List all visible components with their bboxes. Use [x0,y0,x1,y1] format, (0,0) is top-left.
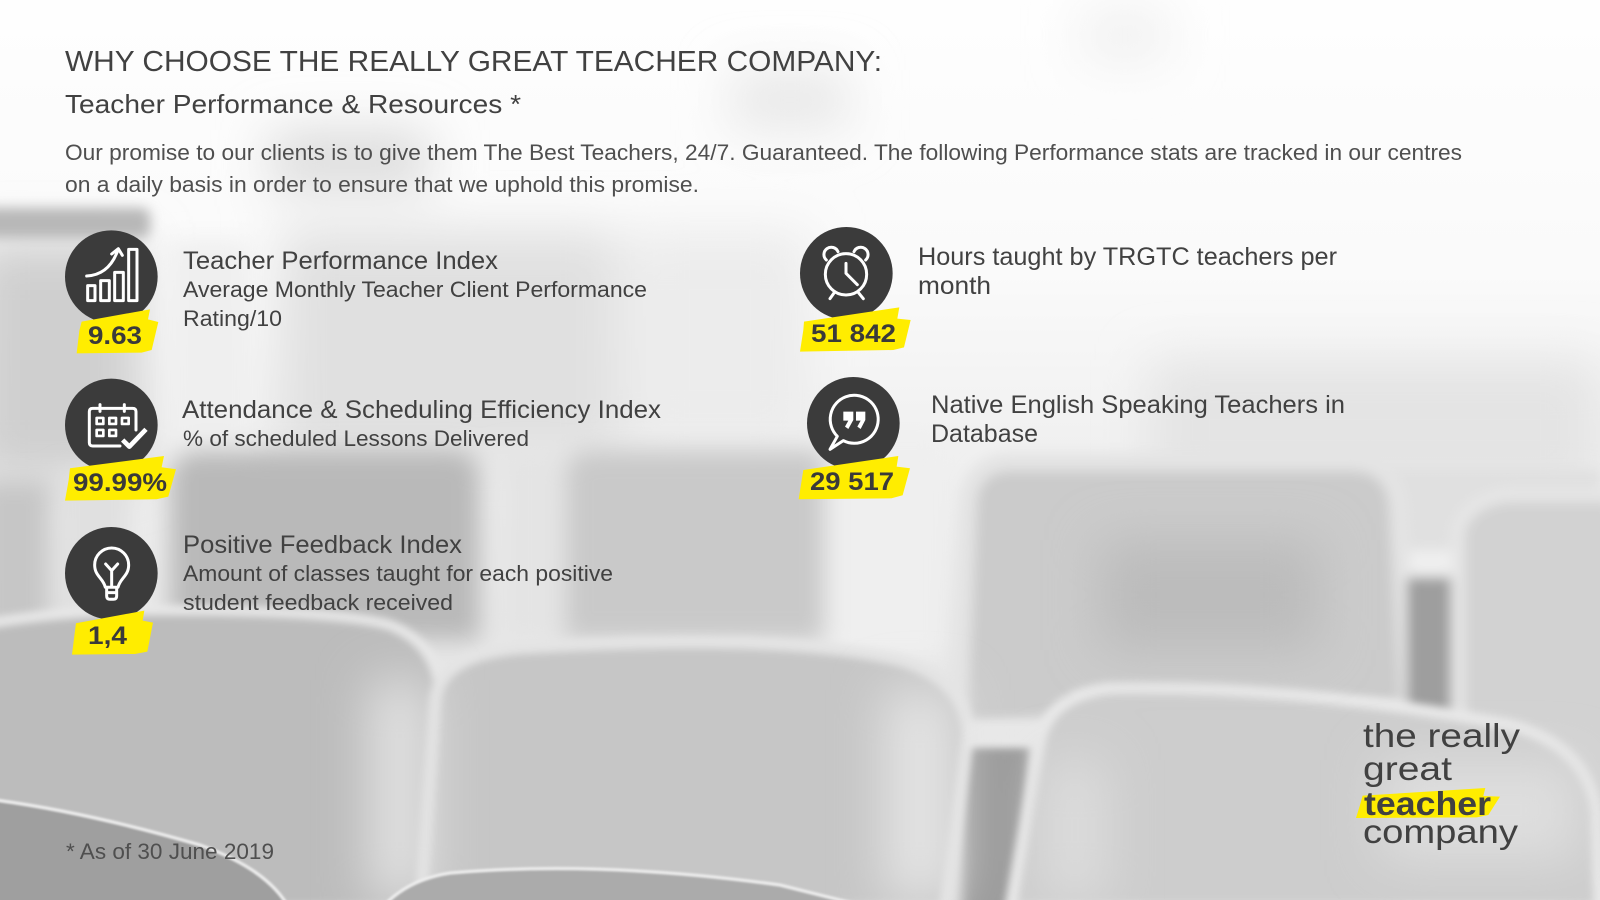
stat heading: Hours taught by TRGTC teachers per [918,243,1337,271]
value badge: 29 517: 29 517 [810,468,894,496]
stat: attendance and scheduling [65,379,662,501]
icon: speech bubble with quotes [807,377,900,470]
intro paragraph: on a daily basis in order to ensure that we uphold this promise. [65,172,699,197]
value badge: 1,4: 1,4 [88,622,127,650]
subtitle: Teacher Performance & Resources * [65,89,521,119]
footnote: * As of 30 June 2019 [66,839,274,864]
value badge: 99.99%: 99.99% [73,469,167,497]
stat heading: Attendance & Scheduling Efficiency Index [182,396,662,424]
value badge: 1,4 [72,611,153,655]
value badge: 29 517 [799,456,910,499]
stat: positive feedback [65,527,613,655]
stat description: student feedback received [183,590,453,615]
stat heading [931,391,1345,448]
stat heading: Positive Feedback Index [183,531,462,559]
icon: rising bar chart [65,230,158,323]
stat heading: Native English Speaking Teachers in [931,391,1345,419]
icon: calendar with check [65,379,158,471]
logo: company [1363,813,1519,850]
value badge: 51 842: 51 842 [811,320,896,348]
logo [1356,717,1521,850]
stat description: Average Monthly Teacher Client Performance [183,277,647,302]
stat: teacher performance index [65,230,647,353]
logo: teacher [1364,785,1491,822]
icon: light bulb [65,527,158,620]
value badge: 9.63: 9.63 [88,322,142,350]
stat description: Amount of classes taught for each positive [183,561,613,586]
stat description [183,277,647,331]
stat: hours taught [800,227,1337,352]
stat description: Rating/10 [183,306,282,331]
value badge: 99.99% [65,456,176,501]
stat heading: Teacher Performance Index [183,247,499,275]
intro paragraph [65,140,1462,197]
value badge: 51 842 [800,307,911,352]
logo: the really [1363,717,1521,754]
value badge: 9.63 [77,309,158,353]
title: WHY CHOOSE THE REALLY GREAT TEACHER COMPANY: [65,46,882,78]
intro paragraph: Our promise to our clients is to give them The Best Teachers, 24/7. Guaranteed. The following Performance stats are tracked in our centres [65,140,1462,165]
stat heading [918,243,1337,300]
stat description: % of scheduled Lessons Delivered [183,426,529,451]
stat description [183,561,613,615]
stat heading: month [918,272,991,300]
stat: native speakers [799,377,1345,499]
icon: alarm clock [800,227,893,320]
stat heading: Database [931,420,1038,448]
logo: great [1363,750,1452,787]
